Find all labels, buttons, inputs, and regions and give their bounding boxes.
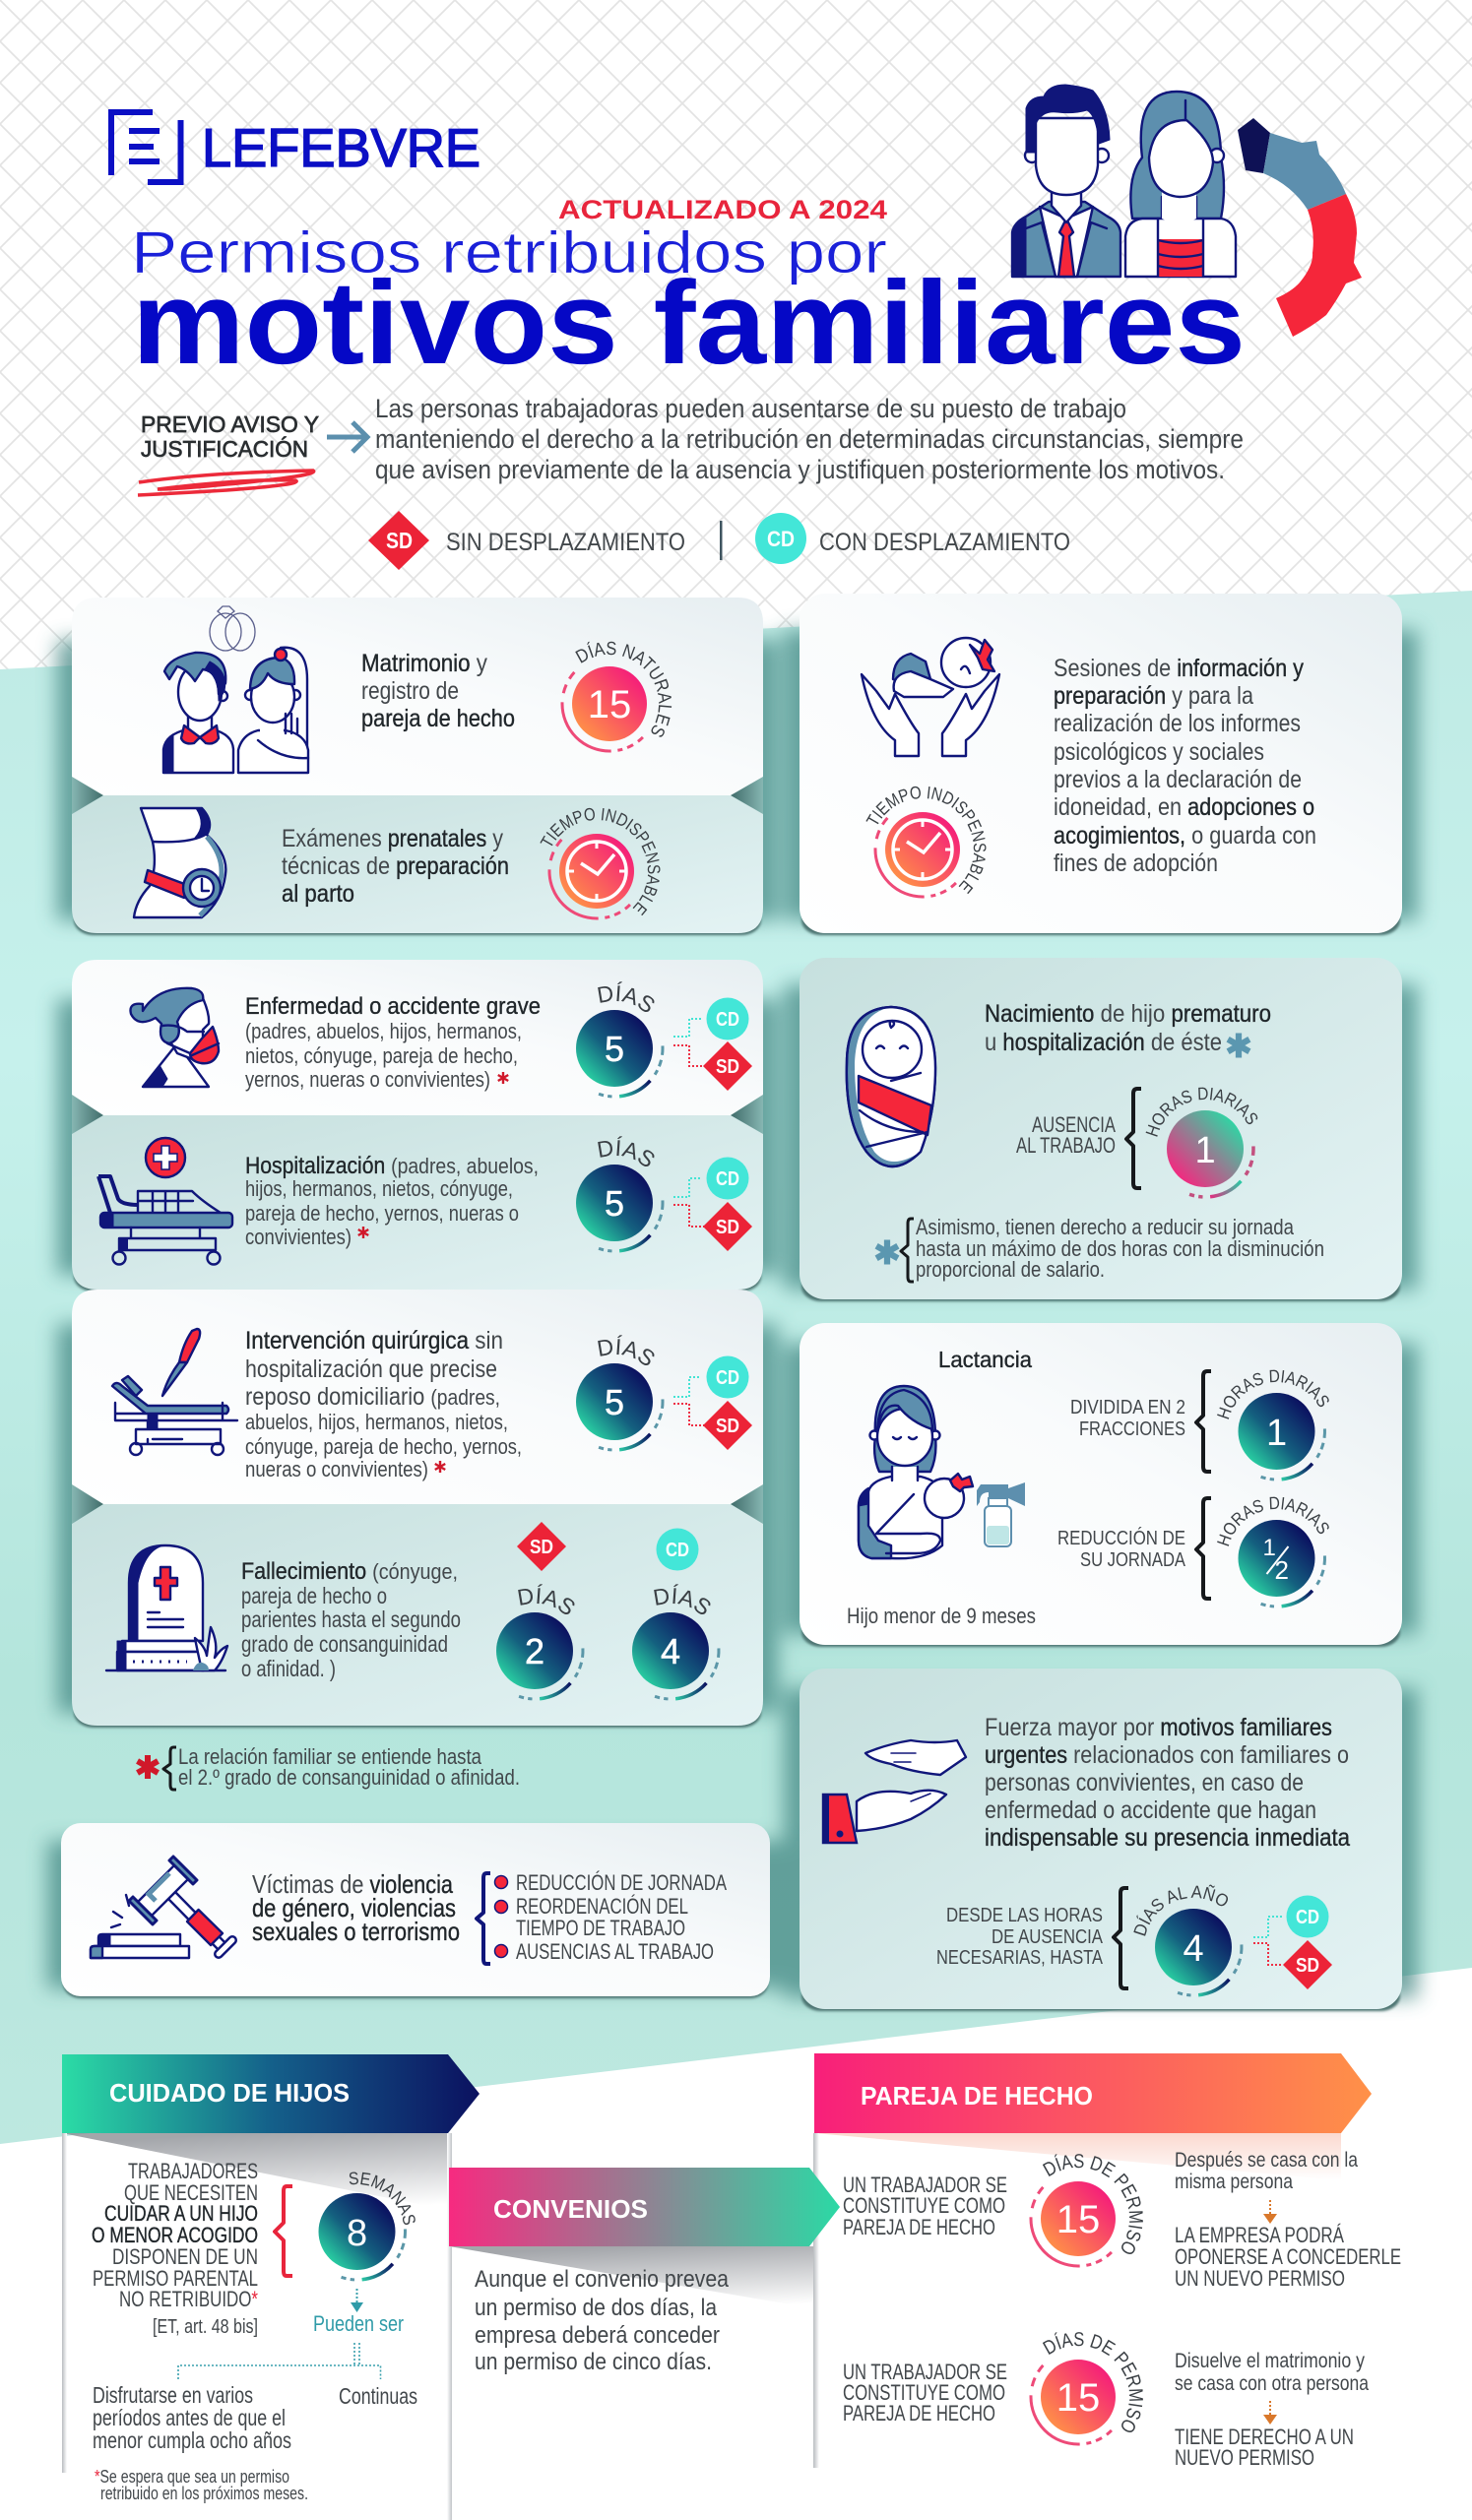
brace [1196,1371,1211,1472]
text: death [241,1558,461,1681]
text: right to new leave: TIENE DERECHO A UN [1175,2425,1354,2449]
legend: CON DESPLAZAMIENTO [819,529,1070,556]
text: prenatal: al parto [282,880,354,908]
text: worker [843,2360,1007,2426]
panel: breastfeeding [800,1323,1402,1647]
badge: 4 days per year: DÍAS AL AÑO [1133,1884,1228,1936]
text: prenatal: Exámenes prenatales y [282,825,503,852]
badge: 5 days: DÍAS [598,981,654,1012]
text: adoption: fines de adopción [1054,850,1218,877]
icon: businesswoman [1125,92,1236,277]
text: marriage: Matrimonio y [361,650,487,677]
badge: 4 days per year [1129,1882,1244,1997]
text: marries same person [1175,2149,1358,2193]
intro paragraph: manteniendo el derecho a la retribución en determinadas circunstancias, siempre [375,424,1244,454]
connectors and CD SD: CD [716,1009,739,1031]
text: workers: CUIDAR A UN HIJO [104,2201,258,2226]
badge: 8 weeks: 8 [347,2213,367,2254]
badge: 4 days per year: 4 [1183,1928,1204,1970]
logo: Lefebvre: LEFEBVRE [202,117,480,178]
label: prior notice: PREVIO AVISO Y [141,411,319,437]
arrow [1263,2401,1277,2425]
text: surgery: abuelos, hijos, hermanos, nietos, [245,1410,508,1434]
connectors and CD SD: CD [716,1367,739,1389]
text: surgery: cónyuge, pareja de hecho, yernos, [245,1434,522,1459]
title: motivos familiares [132,257,1246,389]
footnote: family relationship [138,1744,520,1790]
title: Permisos retribuidos por [131,220,887,285]
intro paragraph [375,394,1244,484]
icon: woman with mask [130,988,219,1087]
text: adoption: preparación y para la [1054,682,1253,710]
text: absence: AL TRABAJO [1016,1133,1116,1158]
badge: 5 days: 5 [605,1029,624,1069]
badge: 15 days leave: DÍAS DE PERMISO [1042,2332,1143,2432]
text: hospitalisation: pareja de hecho, yernos, nueras o [245,1201,519,1226]
panel: childcare [62,2054,480,2503]
SD: 2 days: 2 [525,1631,544,1671]
text: illness: Enfermedad o accidente grave [245,993,541,1020]
badge: 15 days leave: DÍAS DE PERMISO [1042,2154,1143,2254]
legend [368,511,1070,570]
text: adoption: idoneidad, en adopciones o [1054,793,1314,821]
icon: surgery bed and scalpel [112,1329,237,1455]
text: death: o afinidad. ) [241,1656,336,1681]
badge: 15 days leave [1011,2151,1146,2286]
background: white with diamond lattice [0,0,1472,689]
text: illness: (padres, abuelos, hijos, hermanos, [245,1019,522,1043]
text: divided: FRACCIONES [1079,1418,1185,1440]
connectors and CD SD: SD [716,1416,739,1437]
text: absence: AUSENCIA [1032,1112,1116,1137]
text: surgery: nueras o convivientes) [245,1457,428,1481]
badge: 8 weeks: SEMANAS [349,2172,416,2225]
text: workers: NO RETRIBUIDO* [119,2287,258,2311]
text: marries same person: misma persona [1175,2171,1293,2193]
footnote: expected [95,2467,308,2503]
text: force majeure: indispensable su presencia inmediata [985,1824,1350,1852]
text: hospitalisation: hijos, hermanos, nietos, cónyuge, [245,1176,513,1201]
badge: half daily hour: 2 [1274,1555,1289,1585]
text: worker: CONSTITUYE COMO [843,2380,1005,2405]
text: worker [843,2173,1007,2239]
text: premature: u hospitalización de éste [985,1029,1222,1056]
note: reduced working day: Asimismo, tienen derecho a reducir su jornada [916,1215,1295,1239]
badge: 1 daily hour: 1 [1194,1130,1216,1171]
badge: indispensable time: TIEMPO INDISPENSABLE [865,786,987,894]
text: marries another person: Disuelve el matrimonio y [1175,2350,1365,2372]
text: surgery [245,1327,522,1481]
connectors and CD SD [1253,1896,1332,1989]
label: prior notice: JUSTIFICACIÓN [141,436,308,462]
text: worker: UN TRABAJADOR SE [843,2360,1007,2384]
text: periods: menor cumpla ocho años [93,2427,291,2453]
text: illness: nietos, cónyuge, pareja de hecho, [245,1043,518,1068]
legend: CD [767,527,795,551]
heading: Lactancia: Lactancia [938,1347,1032,1372]
banner: domestic partnership: PAREJA DE HECHO [861,2081,1093,2110]
intro paragraph: que avisen previamente de la ausencia y justifiquen posteriormente los motivos. [375,455,1225,484]
label: prior notice [138,411,319,495]
banner: agreements: CONVENIOS [493,2194,648,2224]
banner: childcare [62,2054,480,2133]
dotted branch [178,2343,380,2379]
text: workers: PERMISO PARENTAL [93,2266,258,2291]
icon: mother with baby and bottle [859,1386,1025,1558]
SD: 2 days: DÍAS [518,1584,575,1614]
card: prenatal [72,795,763,933]
badge: indispensable time: TIEMPO INDISPENSABLE [540,807,660,915]
text: marriage: registro de [361,677,459,705]
text: hours of absence: NECESARIAS, HASTA [936,1947,1104,1969]
footnote: family relationship: el 2.º grado de consanguinidad o afinidad. [178,1765,520,1790]
badge: 15 days leave: 15 [1056,2376,1100,2420]
text: workers [92,2159,258,2338]
icon: gauge arc [1238,118,1362,337]
panel: domestic partnership [814,2053,1401,2470]
badge: 5 days: 5 [605,1183,624,1224]
list: measures: REDUCCIÓN DE JORNADA [516,1870,727,1895]
icon: businessman [1012,85,1120,277]
CD: 4 days: CD [666,1540,689,1561]
badge: 8 weeks [306,2169,419,2282]
text: continuous: Continuas [339,2383,417,2409]
text: hours of absence: DESDE LAS HORAS [946,1905,1103,1926]
badge: half daily hour: HORAS DIARIAS [1217,1496,1329,1546]
text: adoption: realización de los informes [1054,710,1301,737]
banner: childcare: CUIDADO DE HIJOS [109,2078,350,2108]
connectors and CD SD: SD [716,1056,739,1078]
text: company may object: LA EMPRESA PODRÁ [1175,2223,1344,2247]
connectors and CD SD [673,1356,752,1450]
text: reduction: REDUCCIÓN DE [1057,1527,1185,1549]
text: force majeure: enfermedad o accidente que hagan [985,1796,1316,1824]
text: force majeure [985,1714,1350,1852]
text: agreements: un permiso de dos días, la [475,2295,718,2321]
text: absence [1016,1112,1116,1158]
brace [1114,1888,1128,1988]
panel: surgery and death [72,1290,763,1730]
note: reduced working day: proporcional de salario. [916,1257,1105,1282]
text: worker: UN TRABAJADOR SE [843,2173,1007,2197]
panel: illness and hospitalisation [72,960,763,1292]
badge: half daily hour [1213,1493,1334,1608]
badge: 1 daily hour: HORAS DIARIAS [1146,1087,1258,1137]
text: surgery: Intervención quirúrgica sin [245,1327,503,1354]
text: death: pareja de hecho o [241,1583,387,1608]
text: marries another person: se casa con otra persona [1175,2372,1369,2395]
text: adoption: acogimientos, o guarda con [1054,822,1316,850]
text: periods [93,2382,291,2453]
panel: victims [61,1823,770,1998]
card: illness [72,960,763,1115]
list: measures: AUSENCIAS AL TRABAJO [516,1939,714,1964]
brace [1126,1089,1141,1188]
text: illness: yernos, nueras o convivientes) [245,1067,490,1092]
shadows behind cards [47,630,1418,1998]
text: company may object: UN NUEVO PERMISO [1175,2266,1345,2291]
connectors and CD SD: CD [716,1168,739,1190]
connectors and CD SD: SD [1296,1955,1319,1977]
text: company may object [1175,2223,1401,2291]
list: measures: TIEMPO DE TRABAJO [516,1916,685,1940]
badge: 15 natural days: 15 [588,683,631,726]
badge: 15 natural days: DÍAS NATURALES [575,642,672,737]
text: periods: Disfrutarse en varios [93,2382,253,2408]
text: hours of absence: DE AUSENCIA [992,1926,1104,1948]
text: death: parientes hasta el segundo [241,1606,461,1632]
text: adoption: Sesiones de información y [1054,655,1304,682]
connectors and CD SD: SD [716,1217,739,1238]
text: worker: PAREJA DE HECHO [843,2401,995,2426]
text: surgery: reposo domiciliario (padres, [245,1383,500,1411]
CD: 4 days: DÍAS [654,1584,711,1614]
text: premature: Nacimiento de hijo prematuro [985,1000,1271,1028]
card: surgery [72,1290,763,1504]
text: prenatal [282,825,509,908]
connectors and CD SD [673,998,752,1091]
SD: 2 days: SD [530,1537,553,1558]
card: hospitalisation [72,1115,763,1290]
text: agreements: un permiso de cinco días. [475,2349,712,2375]
text: hours of absence [936,1905,1104,1969]
card: death [72,1504,763,1726]
panel: agreements [449,2168,840,2375]
footnote: expected: retribuido en los próximos meses. [100,2484,308,2503]
text: reduction [1057,1527,1186,1571]
note: reduced working day [876,1215,1324,1282]
text: workers: DISPONEN DE UN [112,2244,258,2269]
text: agreements: empresa deberá conceder [475,2322,720,2349]
text: force majeure: urgentes relacionados con familiares o [985,1741,1349,1769]
list: measures: REORDENACIÓN DEL [516,1894,688,1919]
text: victims: sexuales o terrorismo [252,1917,460,1946]
icon: couple with rings [163,606,308,773]
icon: hospital bed [98,1138,232,1264]
text: marriage [361,650,515,732]
text: workers: QUE NECESITEN [124,2180,258,2205]
footnote: expected: *Se espera que sea un permiso [95,2467,289,2487]
text: agreements [475,2266,730,2375]
icon: swaddled baby [847,1007,935,1166]
brace [1196,1498,1211,1599]
badge: half daily hour: 1 [1262,1535,1276,1561]
label: updated to 2024: ACTUALIZADO A 2024 [558,195,887,224]
list: measures [494,1870,727,1964]
text: right to new leave: NUEVO PERMISO [1175,2445,1314,2470]
text: hospitalisation: convivientes) [245,1225,352,1249]
text: workers: TRABAJADORES [128,2159,258,2183]
text: divided: DIVIDIDA EN 2 [1070,1397,1185,1418]
badge: 5 days [576,1335,664,1451]
text: victims: Víctimas de violencia [252,1869,453,1899]
badge: 1 daily hour [1142,1084,1262,1199]
legend: SD [386,528,413,553]
CD: 4 days: 4 [661,1631,680,1671]
banner: domestic partnership [814,2053,1372,2133]
text: company may object: OPONERSE A CONCEDERLE [1175,2244,1401,2269]
text: marries another person [1175,2350,1369,2395]
icon: gravestone [106,1545,227,1670]
badge: 5 days [576,981,664,1099]
badge: 1 daily hour [1213,1366,1334,1481]
brace: red [275,2186,292,2276]
icon: gavel [91,1857,232,1958]
text: reduction: SU JORNADA [1080,1549,1186,1571]
badge: 15 days leave: 15 [1056,2198,1100,2241]
footnote: family relationship: La relación familiar se entiende hasta [178,1744,482,1769]
text: hospitalisation [245,1153,539,1249]
connectors and CD SD: CD [1296,1907,1319,1928]
arrow [327,422,367,452]
intro paragraph: Las personas trabajadoras pueden ausentarse de su puesto de trabajo [375,394,1126,423]
text: worker: PAREJA DE HECHO [843,2215,995,2239]
panel: force majeure [800,1669,1402,2011]
logo: Lefebvre [111,112,480,182]
text: prenatal: técnicas de preparación [282,852,509,880]
badge: 15 days leave [1011,2329,1146,2464]
text: hospitalisation: Hospitalización (padres, abuelos, [245,1153,539,1179]
text: worker: CONSTITUYE COMO [843,2193,1005,2218]
CD: 4 days [620,1528,721,1701]
text: force majeure: Fuerza mayor por motivos familiares [985,1714,1332,1741]
panel: adoption sessions [800,594,1402,937]
text: victims [252,1869,460,1946]
panel: marriage and prenatal [72,598,763,937]
text: illness [245,993,541,1092]
text: surgery: hospitalización que precise [245,1355,497,1383]
text: right to new leave [1175,2425,1354,2470]
text: death: Fallecimiento (cónyuge, [241,1558,458,1585]
panel: premature birth [800,958,1402,1301]
text: workers: [ET, art. 48 bis] [153,2316,258,2338]
text: periods: períodos antes de que el [93,2405,286,2430]
badge: 1 daily hour: 1 [1266,1413,1287,1454]
note: reduced working day: hasta un máximo de dos horas con la disminución [916,1236,1324,1261]
text: death: grado de consanguinidad [241,1631,448,1657]
text: adoption [1054,655,1316,877]
badge: 5 days [576,1136,664,1252]
text: marries same person: Después se casa con la [1175,2149,1358,2172]
badge: 5 days: 5 [605,1382,624,1422]
SD: 2 days [496,1522,585,1701]
icon: hands [823,1740,966,1843]
brace [477,1873,490,1964]
column shadows [62,2133,1341,2520]
text: adoption: previos a la declaración de [1054,766,1302,793]
icon: hands holding baby [862,638,999,756]
legend: SIN DESPLAZAMIENTO [446,529,685,556]
arrow [1263,2200,1277,2224]
text: divided [1070,1397,1185,1440]
text: adoption: psicológicos y sociales [1054,738,1264,766]
text: marriage: pareja de hecho [361,705,515,732]
card: marriage [72,598,763,795]
badge: 1 daily hour: HORAS DIARIAS [1217,1370,1329,1419]
text: victims: de género, violencias [252,1893,456,1922]
label: can be: Pueden ser [313,2311,404,2336]
connectors and CD SD [673,1158,752,1251]
text: under 9 months: Hijo menor de 9 meses [847,1604,1036,1628]
badge: 5 days: DÍAS [598,1335,654,1365]
banner: agreements [449,2168,840,2246]
background: mint band [0,591,1472,2144]
text: agreements: Aunque el convenio prevea [475,2266,730,2293]
text: premature [985,1000,1271,1057]
text: force majeure: personas convivientes, en caso de [985,1769,1304,1796]
icon: pregnant belly [134,808,225,917]
text: workers: O MENOR ACOGIDO [92,2223,258,2247]
badge: 5 days: DÍAS [598,1136,654,1166]
arrow [351,2289,363,2312]
